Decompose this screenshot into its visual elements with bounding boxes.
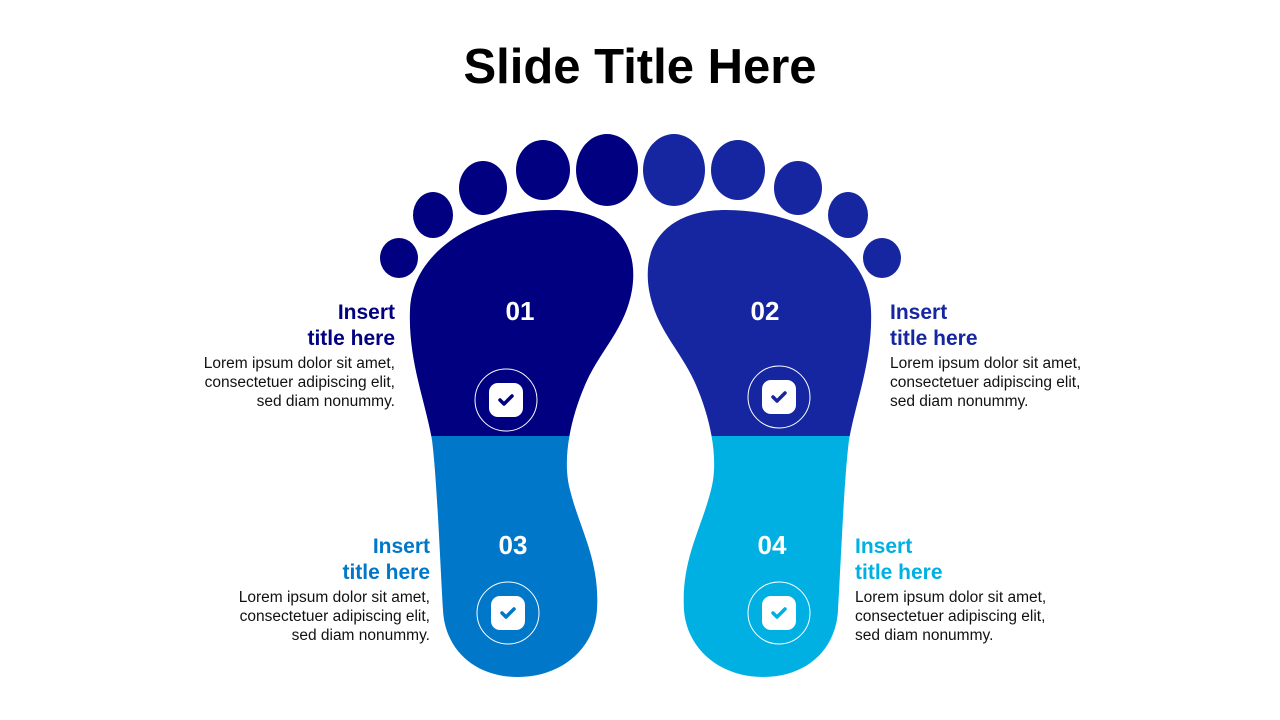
icon 1 (475, 369, 537, 431)
text block 4: sed diam nonummy. (855, 627, 993, 644)
left foot (380, 134, 638, 677)
numbers: 01 (506, 296, 534, 326)
text block 3: Lorem ipsum dolor sit amet, (239, 589, 430, 606)
text block 2: Insert (890, 301, 947, 324)
text block 2: title here (890, 327, 978, 350)
right foot (643, 134, 901, 677)
text block 3: sed diam nonummy. (292, 627, 430, 644)
text block 4 (855, 535, 1046, 644)
feet graphic (380, 134, 901, 677)
text block 4: Insert (855, 535, 912, 558)
text block 1: consectetuer adipiscing elit, (205, 374, 395, 391)
text block 3: consectetuer adipiscing elit, (240, 608, 430, 625)
text block 3: Insert (373, 535, 430, 558)
title: Slide Title Here (463, 40, 817, 94)
text block 3 (239, 535, 430, 644)
text block 2 (890, 301, 1081, 410)
text block 4: consectetuer adipiscing elit, (855, 608, 1045, 625)
text block 1: title here (307, 327, 395, 350)
icon 3 (477, 582, 539, 644)
text block 2: Lorem ipsum dolor sit amet, (890, 355, 1081, 372)
numbers: 04 (758, 530, 787, 560)
text block 1: Insert (338, 301, 395, 324)
text block 4: Lorem ipsum dolor sit amet, (855, 589, 1046, 606)
numbers: 03 (499, 530, 527, 560)
text block 4: title here (855, 561, 943, 584)
text block 1 (204, 301, 395, 410)
icon 4 (748, 582, 810, 644)
text block 1: Lorem ipsum dolor sit amet, (204, 355, 395, 372)
numbers: 02 (751, 296, 779, 326)
text block 2: consectetuer adipiscing elit, (890, 374, 1080, 391)
text block 3: title here (342, 561, 430, 584)
text block 1: sed diam nonummy. (257, 393, 395, 410)
text block 2: sed diam nonummy. (890, 393, 1028, 410)
numbers (499, 296, 787, 560)
icon 2 (748, 366, 810, 428)
